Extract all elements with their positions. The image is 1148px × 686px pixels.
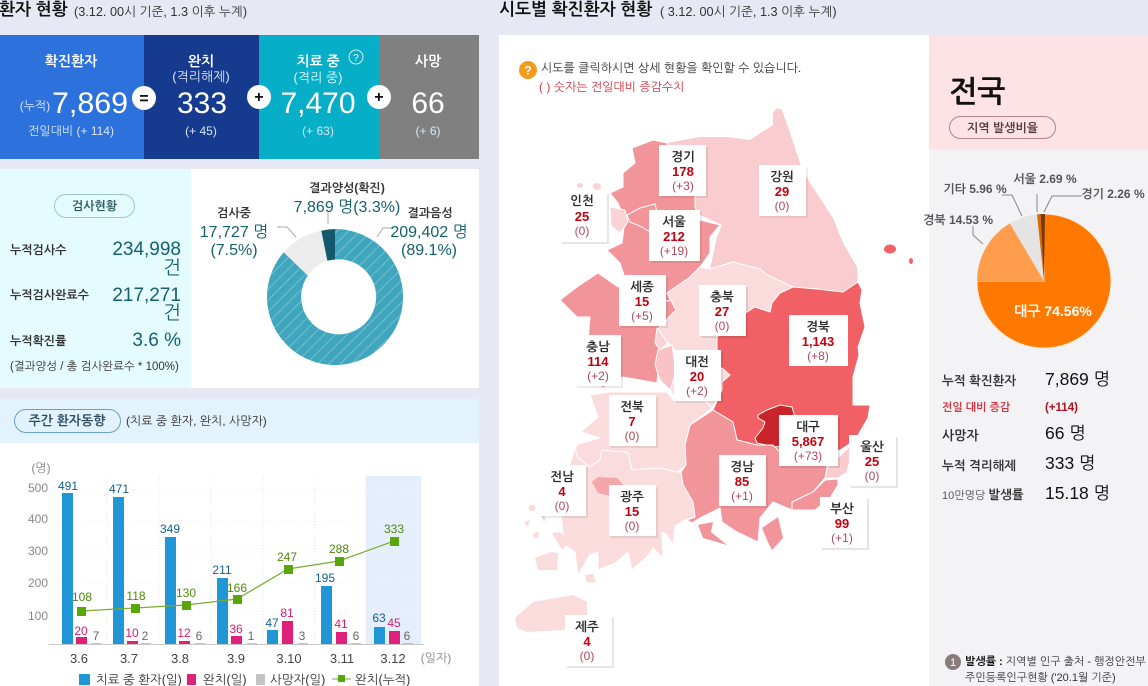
panel: national summary — [923, 35, 1148, 686]
pie labels: 경기 2.26 % — [1081, 187, 1145, 201]
x axis labels: 3.11 — [330, 651, 354, 666]
panel: test donut chart — [191, 169, 479, 388]
heading: regional status — [499, 0, 837, 19]
value labels: 118 — [126, 589, 146, 603]
map label: Chungbuk: 27 — [715, 304, 729, 319]
card: in treatment — [259, 35, 379, 159]
legend — [79, 673, 410, 686]
map label: Gangwon: 강원 — [770, 170, 794, 184]
value labels: 471 — [109, 482, 129, 496]
stats list: 7,869 명 — [1045, 369, 1110, 389]
card: recovered: (+ 45) — [185, 124, 217, 138]
footnote: 1 — [950, 657, 956, 669]
map label: Busan: (+1) — [831, 531, 853, 545]
value labels: 108 — [72, 590, 92, 604]
card: deaths: 사망 — [415, 53, 442, 69]
region: Seoul — [627, 204, 657, 232]
pie labels: 경북 14.53 % — [923, 213, 993, 227]
value labels: 288 — [329, 542, 349, 556]
panel: weekly patient trend: (치료 중 환자, 완치, 사망자) — [126, 414, 267, 428]
map label: Gyeongbuk: 경북 — [806, 320, 830, 334]
value labels: 63 — [372, 611, 386, 625]
map label: Gwangju — [609, 485, 658, 538]
x axis labels — [70, 651, 451, 666]
bars: recovered — [76, 621, 400, 644]
bar chart: 400 — [28, 512, 48, 526]
stats list: 10만명당 발생률 — [942, 488, 1024, 502]
value labels: 3 — [299, 629, 306, 643]
map label: Ulsan: (0) — [865, 469, 879, 483]
value labels: 45 — [387, 616, 401, 630]
region: Incheon — [610, 207, 628, 233]
map label: Gwangju: 15 — [625, 504, 639, 519]
stats list: 누적 확진환자 — [942, 374, 1016, 388]
region: Jeonbuk — [575, 392, 712, 472]
heading: regional status: 시도별 확진환자 현황 — [499, 0, 652, 19]
region: Busan — [792, 479, 838, 510]
map label: Sejong: 15 — [635, 294, 649, 309]
x axis labels: 3.12 — [380, 651, 406, 666]
pill: regional share — [950, 116, 1056, 138]
value labels: 20 — [74, 624, 88, 638]
map label: Daegu — [779, 415, 840, 468]
pie labels: 대구 74.56% — [1014, 303, 1092, 319]
map label: Daejeon: (+2) — [686, 384, 708, 398]
region: Jeonnam — [560, 448, 695, 575]
heading: regional status: ( 3.12. 00시 기준, 1.3 이후 누계) — [660, 5, 837, 19]
map label: Sejong: (+5) — [631, 309, 653, 323]
region: Gyeonggi — [607, 140, 720, 305]
panel: test status figures: 누적검사수 — [10, 243, 67, 257]
x axis labels: 3.9 — [227, 651, 245, 666]
value labels: 211 — [212, 563, 232, 577]
card: deaths: (+ 6) — [415, 124, 441, 138]
map label: Gwangju: 광주 — [620, 490, 644, 504]
map note: 시도를 클릭하시면 상세 현황을 확인할 수 있습니다. — [541, 61, 801, 75]
value labels: 2 — [142, 629, 149, 643]
label: positive — [294, 181, 400, 216]
footnote — [945, 654, 1146, 684]
line: cumulative recovered — [77, 537, 399, 616]
x axis labels: 3.8 — [171, 651, 189, 666]
panel: test status figures: 누적확진률 — [10, 334, 67, 348]
value labels: 6 — [404, 629, 411, 643]
map label: Gyeonggi: 경기 — [671, 150, 695, 164]
bars: deaths — [91, 643, 413, 644]
pill: test status: 검사현황 — [72, 199, 118, 213]
panel: test status figures: 217,271 — [112, 285, 181, 306]
region: Daejeon — [655, 345, 676, 390]
region: Chungbuk — [657, 262, 793, 408]
pie labels: 기타 5.96 % — [943, 182, 1007, 196]
map label: Seoul — [649, 210, 702, 263]
map label: Gyeongnam: 경남 — [730, 460, 754, 474]
map label: Busan: 99 — [835, 516, 849, 531]
label: testing — [200, 206, 268, 259]
region: Gyeongnam — [681, 410, 827, 542]
map label: Jeju — [565, 615, 614, 668]
map label: Busan: 부산 — [830, 502, 854, 516]
card: in treatment: 치료 중 — [296, 53, 340, 69]
map label: Daegu: 5,867 — [792, 434, 824, 449]
panel: test status figures: 건 — [163, 258, 181, 279]
value labels: 12 — [177, 626, 191, 640]
pie leader lines — [973, 194, 1082, 244]
map label: Gyeonggi: (+3) — [672, 179, 694, 193]
bars: in treatment — [62, 493, 385, 644]
card: confirmed: 7,869 — [52, 87, 128, 120]
map label: Gyeongbuk — [789, 315, 848, 366]
icon: help: ? — [524, 64, 532, 78]
leader lines — [277, 212, 392, 237]
bar chart: 500 — [28, 481, 48, 495]
region: Gyeongbuk — [713, 282, 870, 455]
label: testing: (7.5%) — [210, 242, 258, 259]
map label: Jeju: 4 — [583, 634, 591, 649]
map label: Gyeongnam — [719, 455, 768, 508]
map label: Daejeon: 20 — [690, 369, 704, 384]
value labels: 130 — [176, 586, 196, 600]
map label: Sejong: 세종 — [630, 280, 654, 294]
card: confirmed: (누적) — [20, 99, 50, 113]
map label: Gyeongbuk: (+8) — [807, 349, 829, 363]
map label: Gangwon — [759, 165, 808, 218]
region: Ulleung and Dokdo — [884, 244, 896, 254]
bar chart: 100 — [28, 609, 48, 623]
pie chart — [977, 214, 1111, 348]
map label: Jeonnam — [540, 465, 588, 518]
panel: test status figures: 건 — [163, 303, 181, 324]
panel: regional map — [499, 35, 929, 686]
value labels: 6 — [196, 629, 203, 643]
stats list — [942, 369, 1110, 503]
map label: Ulsan: 울산 — [860, 440, 884, 454]
card: recovered — [144, 35, 259, 159]
region: Ulsan — [825, 437, 857, 478]
region: Gwangju — [592, 477, 625, 497]
map label: Gyeongbuk: 1,143 — [802, 334, 834, 349]
panel: summary cards — [0, 35, 479, 159]
stats list: 누적 격리해제 — [942, 459, 1016, 473]
map label: Ulsan: 25 — [865, 454, 879, 469]
map label: Incheon: 인천 — [570, 194, 594, 208]
panel: test status figures: 누적검사완료수 — [10, 288, 90, 302]
card: recovered: (격리해제) — [172, 69, 230, 84]
map label: Gyeonggi: 178 — [672, 164, 694, 179]
map label: Jeju: (0) — [580, 649, 594, 663]
label: testing: 검사중 — [217, 206, 252, 220]
label: negative: 결과음성 — [407, 206, 453, 220]
value labels: 36 — [229, 622, 243, 636]
footnote: 주민등록인구현황 ('20.1월 기준) — [965, 671, 1116, 684]
card: in treatment: 7,470 — [280, 87, 356, 120]
map label: Jeonnam: 전남 — [550, 470, 574, 484]
value labels: 47 — [265, 616, 279, 630]
map label: Gyeongnam: (+1) — [731, 489, 753, 503]
map label: Gyeonggi — [659, 145, 708, 198]
map label: Sejong — [619, 275, 668, 328]
value labels: 7 — [93, 629, 100, 643]
card: recovered: 333 — [177, 87, 227, 120]
map label: Chungnam: 충남 — [586, 340, 610, 354]
value labels: 166 — [227, 581, 247, 595]
map label: Jeonnam: 4 — [558, 484, 566, 499]
bar chart: (명) — [31, 461, 51, 475]
x axis labels: 3.10 — [276, 651, 302, 666]
panel: test status figures — [0, 169, 191, 388]
map label: Jeju: 제주 — [575, 620, 599, 634]
map label: Busan — [820, 497, 869, 550]
panel: test status figures: 3.6 % — [132, 330, 181, 351]
x axis labels: 3.6 — [70, 651, 88, 666]
value labels: 333 — [384, 522, 404, 536]
panel: test status figures: 234,998 — [112, 239, 181, 260]
stats list: 15.18 명 — [1045, 483, 1110, 503]
card: in treatment: (+ 63) — [302, 124, 334, 138]
value labels: 491 — [58, 479, 78, 493]
heading: nationwide: 전국 — [949, 76, 1005, 109]
stats list: 사망자 — [942, 428, 979, 443]
map label: Jeonnam: (0) — [555, 499, 569, 513]
map of Korea — [515, 108, 913, 632]
map label: Gangwon: 29 — [775, 184, 789, 199]
region: Gangwon — [667, 108, 858, 292]
stats list: (+114) — [1045, 402, 1078, 414]
map label: Gyeongnam: 85 — [735, 474, 749, 489]
panel: test status figures: (결과양성 / 총 검사완료수 * 100%) — [10, 360, 179, 373]
map label: Chungbuk — [699, 285, 748, 338]
map label: Chungbuk: (0) — [715, 319, 729, 333]
panel: weekly patient trend — [0, 399, 479, 686]
label: negative — [390, 206, 468, 259]
map label: Jeonbuk: 7 — [628, 414, 636, 429]
region: Daegu — [755, 405, 795, 447]
value labels: 10 — [125, 626, 139, 640]
value labels: 349 — [160, 522, 180, 536]
label: negative: 209,402 명 — [390, 223, 468, 241]
card: in treatment: ? — [353, 53, 359, 64]
pill: test status — [54, 194, 134, 218]
stats list: 66 명 — [1045, 423, 1086, 443]
card: confirmed: 전일대비 (+ 114) — [28, 124, 114, 138]
label: negative: (89.1%) — [401, 242, 457, 259]
card: in treatment: (격리 중) — [294, 70, 342, 85]
map label: Chungnam — [575, 335, 623, 388]
map label: Gwangju: (0) — [625, 519, 639, 533]
map note: ( ) 숫자는 전일대비 증감수치 — [539, 80, 684, 94]
value labels: 6 — [353, 629, 360, 643]
heading: patient status — [0, 0, 247, 19]
card: confirmed: 확진환자 — [45, 53, 98, 69]
pill: regional share: 지역 발생비율 — [967, 121, 1039, 135]
map label: Jeonbuk: 전북 — [620, 400, 644, 414]
x axis labels: (일자) — [421, 651, 451, 665]
map label: Daejeon: 대전 — [685, 355, 709, 369]
value labels: 1 — [248, 629, 255, 643]
map label: Chungbuk: 충북 — [710, 290, 734, 304]
value labels — [58, 479, 411, 643]
donut chart — [267, 229, 403, 365]
card: recovered: 완치 — [188, 53, 214, 69]
value labels: 81 — [280, 606, 294, 620]
stats list: 전일 대비 증감 — [942, 401, 1010, 414]
card: deaths — [379, 35, 479, 159]
stats list: 333 명 — [1045, 453, 1096, 473]
label: testing: 17,727 명 — [200, 223, 268, 241]
map label: Chungnam: (+2) — [587, 369, 609, 383]
value labels: 247 — [277, 550, 297, 564]
bar chart: 300 — [28, 544, 48, 558]
map label: Gangwon: (0) — [775, 199, 789, 213]
x axis labels: 3.7 — [120, 651, 138, 666]
bar chart — [28, 461, 451, 686]
icon: help — [519, 61, 537, 79]
map label: Jeonbuk: (0) — [625, 429, 639, 443]
map label: Ulsan — [849, 435, 898, 488]
operators — [132, 85, 391, 110]
value labels: 41 — [334, 617, 348, 631]
footnote: 발생률 : 지역별 인구 출처 - 행정안전부 — [965, 655, 1146, 668]
map label: Seoul: 서울 — [662, 215, 686, 229]
map note — [539, 61, 801, 94]
map label: Daegu: 대구 — [796, 420, 820, 434]
map label: Incheon: (0) — [575, 224, 589, 238]
label: positive: 결과양성(확진) — [309, 181, 385, 195]
map label: Incheon — [560, 192, 609, 244]
bar chart: 200 — [28, 576, 48, 590]
pie labels: 서울 2.69 % — [1013, 172, 1077, 186]
map label: Daegu: (+73) — [794, 449, 822, 463]
pill: weekly trend — [14, 410, 120, 432]
region: Jeju — [515, 595, 587, 632]
label: positive: 7,869 명(3.3%) — [294, 198, 400, 216]
card: confirmed — [0, 35, 144, 159]
map label: Chungnam: 114 — [588, 354, 609, 369]
pie labels — [923, 172, 1145, 319]
map label: Incheon: 25 — [575, 209, 589, 224]
heading: patient status: 환자 현황 — [0, 0, 68, 19]
value labels: 195 — [315, 571, 335, 585]
region: Sejong — [655, 328, 668, 350]
map label: Seoul: 212 — [663, 229, 685, 244]
pill: weekly trend: 주간 환자동향 — [29, 413, 106, 428]
map label: Seoul: (+19) — [660, 244, 688, 258]
card: deaths: 66 — [411, 87, 445, 120]
heading: patient status: (3.12. 00시 기준, 1.3 이후 누계) — [74, 5, 247, 19]
map label: Jeonbuk — [609, 395, 658, 448]
map label: Daejeon — [674, 350, 723, 403]
region: Chungnam — [560, 273, 676, 388]
